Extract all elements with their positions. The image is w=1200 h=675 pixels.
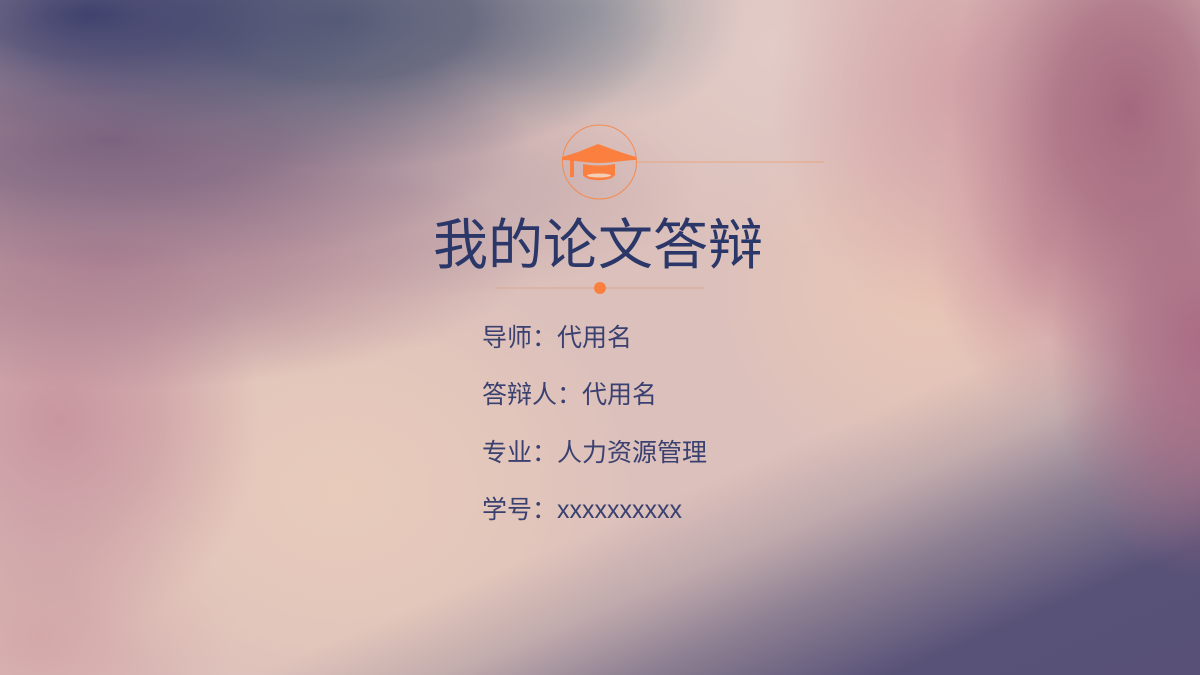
info: advisor: 导师：代用名: [482, 324, 632, 352]
info: defender: 答辩人：代用名: [482, 381, 657, 409]
info: major: 专业：人力资源管理: [482, 439, 707, 467]
circle outline: [562, 125, 636, 199]
divider with dot: [495, 282, 704, 294]
icon: graduation cap: [562, 144, 636, 180]
title: 我的论文答辩: [433, 214, 763, 276]
info: student number: 学号：xxxxxxxxxx: [482, 496, 682, 524]
emblem: graduation cap in circle with line: [562, 124, 824, 200]
connector line: [637, 161, 824, 163]
